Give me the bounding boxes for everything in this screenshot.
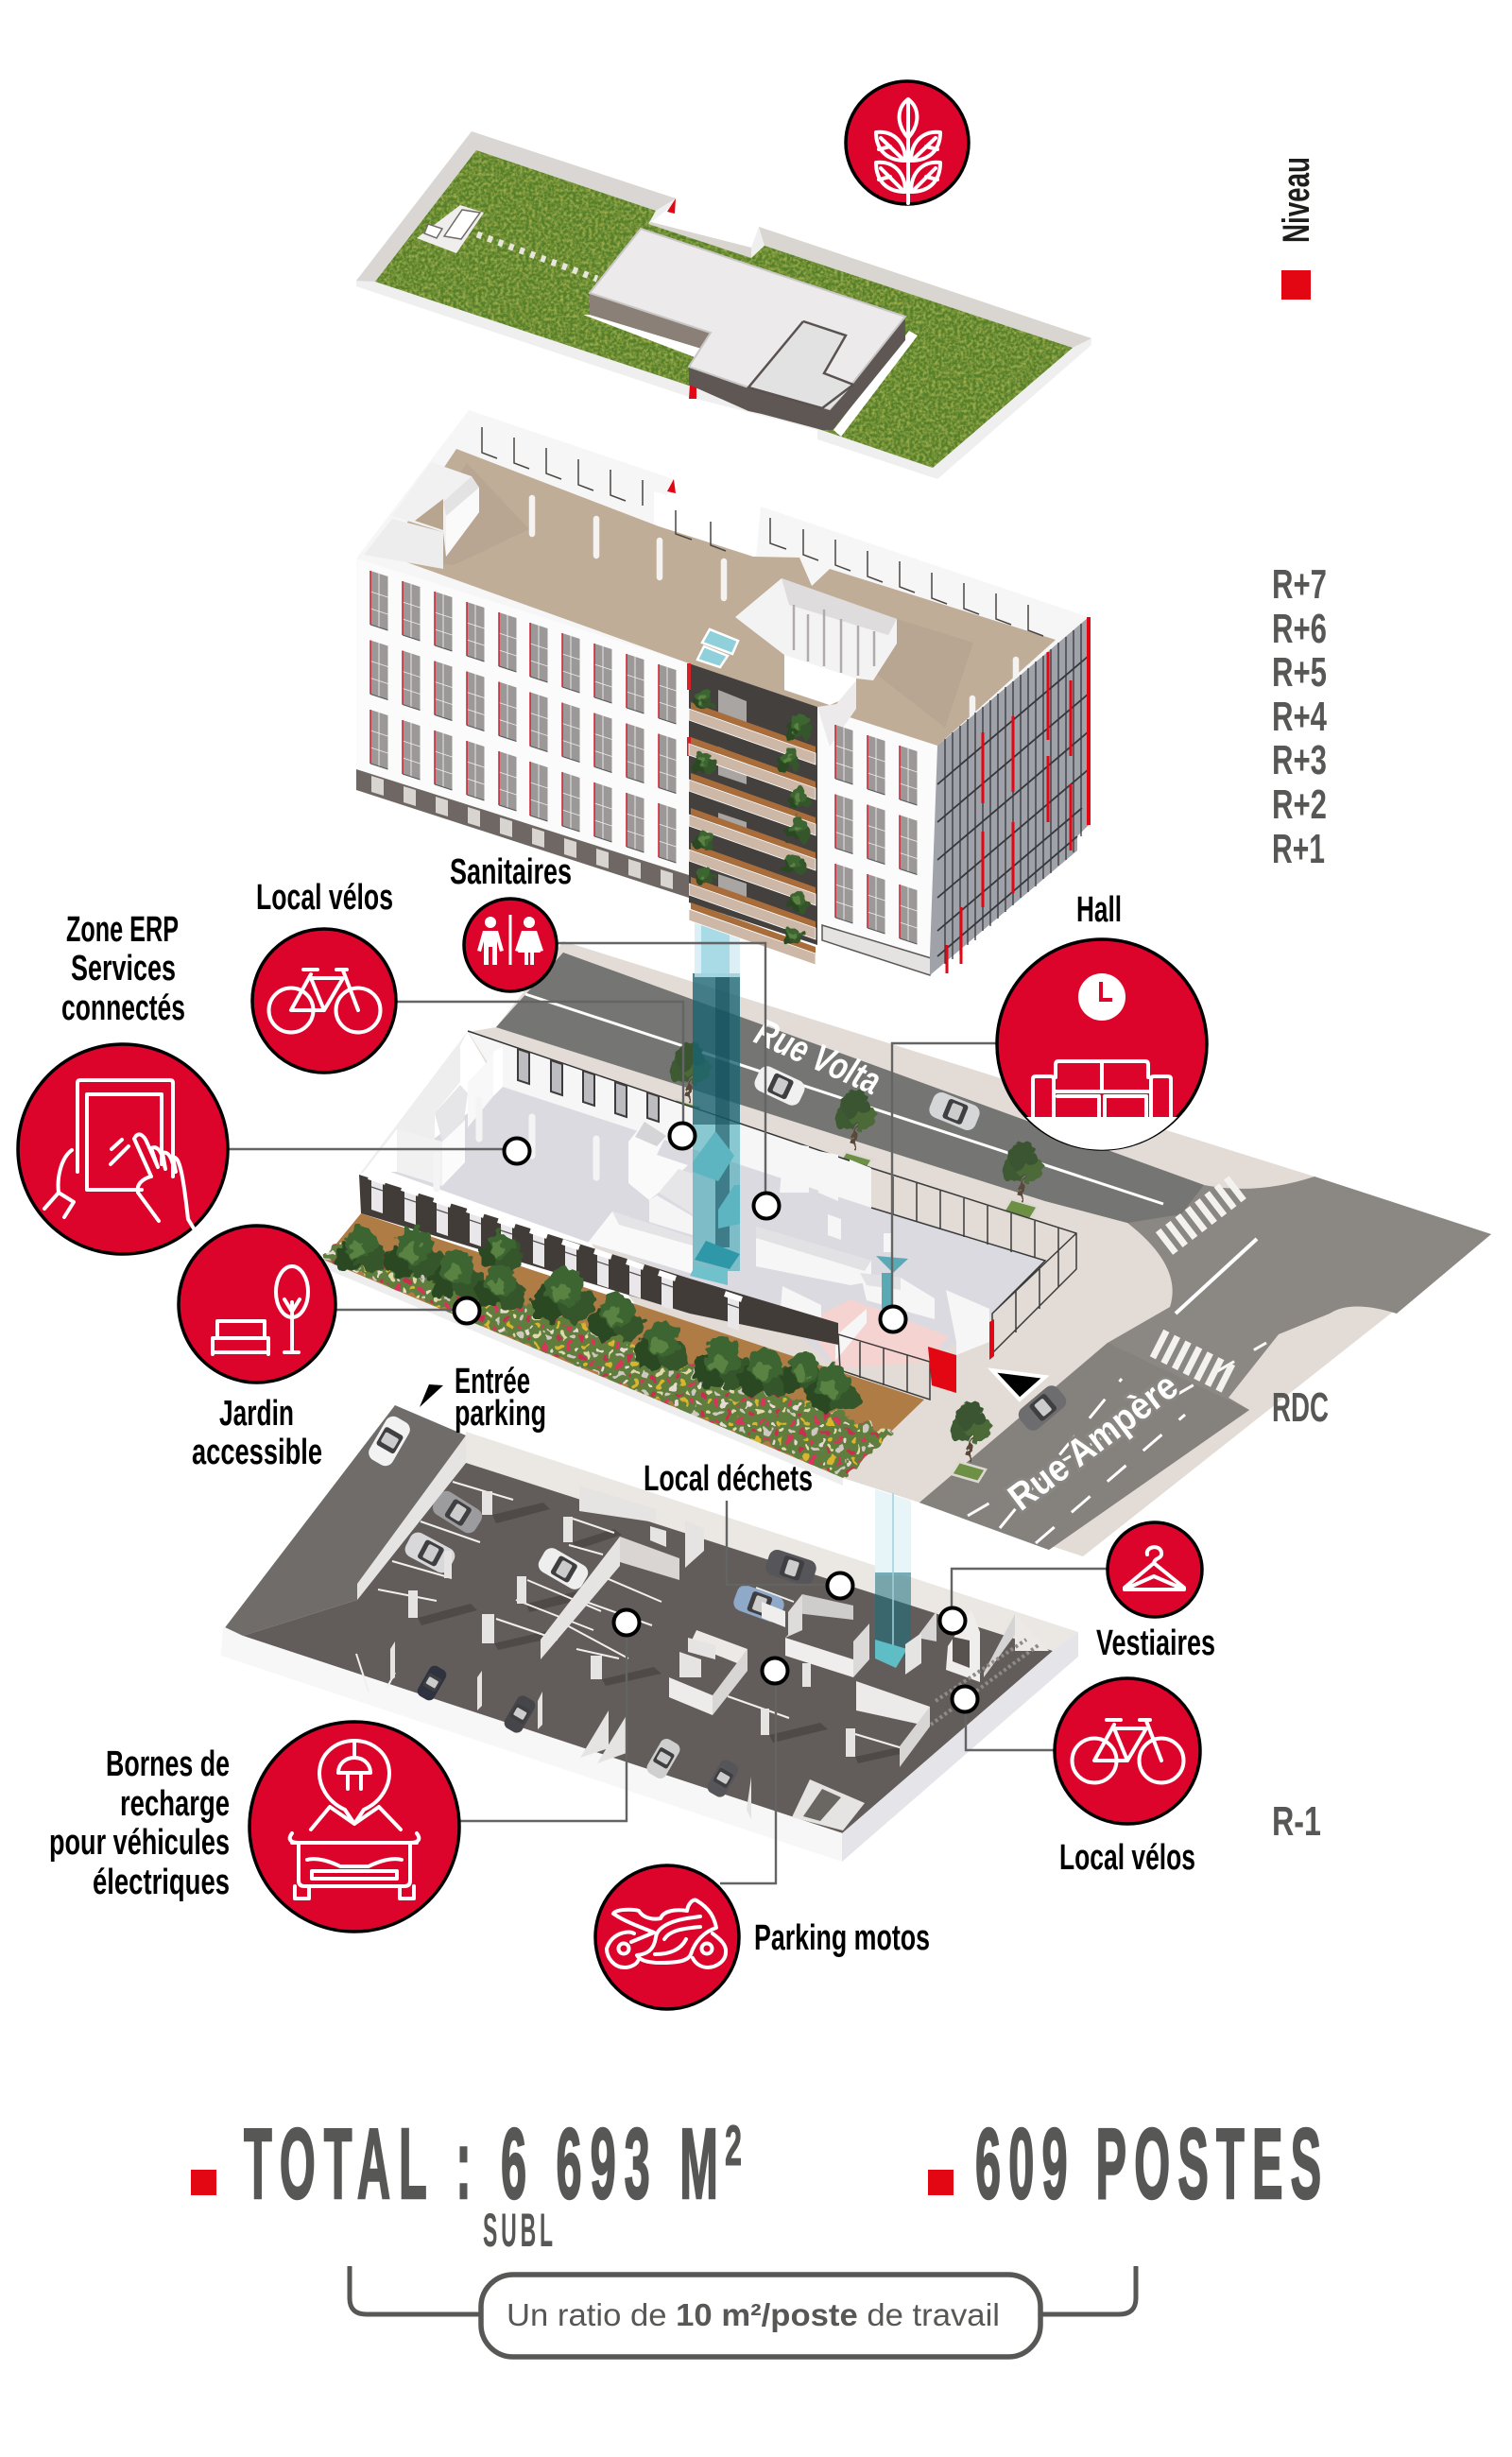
label: Zone ERP Services connectés (61, 910, 185, 1028)
stepping stones (477, 234, 597, 279)
connector lines (228, 943, 1108, 1883)
street lane markings (525, 994, 1266, 1543)
icon: bicycle upper (252, 929, 396, 1073)
panel: roof terrace level (356, 131, 1091, 479)
lift shafts glass (697, 629, 738, 667)
level labels R+7 to R+1: R+1 (1272, 826, 1325, 872)
right wing windows (835, 725, 917, 944)
vertical shaft: lower section (875, 1489, 911, 1668)
level labels R+7 to R+1 (1272, 561, 1327, 872)
label: Jardin accessible: accessible (192, 1433, 322, 1472)
dark south wall (359, 1175, 838, 1345)
back wall with windows (468, 1031, 871, 1208)
balconies with planters (689, 690, 816, 965)
label: Vestiaires: Vestiaires (1096, 1624, 1215, 1663)
parking bay lines (356, 1482, 902, 1748)
level labels R+7 to R+1: R+4 (1272, 694, 1327, 740)
back wall (466, 1432, 1078, 1651)
legend marker (1281, 270, 1311, 300)
icon: tablet touch (18, 1044, 228, 1254)
workstation count stat: 609 POSTES (975, 2108, 1321, 2220)
red corner mark (667, 479, 676, 493)
service core (735, 578, 897, 747)
motorcycle and bike storage texture (931, 1640, 1040, 1725)
right wing front facade (817, 707, 937, 960)
icon: hall sofa and clock (997, 939, 1207, 1150)
red entrance (928, 1319, 994, 1393)
partition walls (357, 1435, 1049, 1830)
label: Bornes de recharge: Bornes de (106, 1744, 230, 1784)
icon: bench and tree (179, 1226, 335, 1383)
right facade (930, 617, 1089, 975)
rooftop volume (590, 229, 905, 430)
street name: Rue Volta: Rue Volta (748, 1011, 886, 1103)
legend heading: Niveau: Niveau (1276, 157, 1317, 243)
total surface stat: TOTAL : 6 693 M (244, 2108, 718, 2220)
label: Local vélos upper: Local vélos (256, 878, 393, 918)
location pins (454, 1123, 977, 1712)
vertical shaft: upper section (693, 973, 740, 1271)
ground floor slab (390, 1087, 1045, 1368)
label: Zone ERP Services connectés: Services (71, 949, 176, 988)
icon: motorcycle (595, 1865, 739, 2009)
planter box (417, 205, 484, 253)
icon: hanger (1108, 1522, 1202, 1617)
label: Zone ERP Services connectés: connectés (61, 988, 185, 1028)
red section marks (667, 198, 696, 399)
label: Parking motos: Parking motos (754, 1918, 930, 1958)
right wing ground glazing (822, 925, 937, 975)
total surface stat: SUBL (483, 2205, 553, 2258)
panel: R-1 parking level (221, 1405, 1078, 1862)
label: Bornes de recharge: pour véhicules (49, 1823, 230, 1863)
panel: R+1 to R+7 office building (356, 410, 1089, 975)
label: Sanitaires: Sanitaires (450, 852, 572, 892)
icon: leaf branch (846, 81, 969, 204)
sidewalk base (468, 941, 1491, 1556)
street name: Rue Ampère: Rue Ampère (1001, 1365, 1186, 1519)
road surfaces (496, 953, 1491, 1550)
back and side glazing (838, 1168, 1076, 1400)
label: Jardin accessible (192, 1394, 322, 1472)
icon: toilets (464, 899, 557, 991)
crosswalks (1157, 1187, 1238, 1380)
ratio bracket and callout (350, 2266, 1136, 2357)
accessible garden (319, 1213, 924, 1486)
central balcony recess (689, 663, 817, 945)
level labels R+7 to R+1: R+7 (1272, 561, 1327, 608)
left facade (356, 558, 689, 875)
level labels R+7 to R+1: R+6 (1272, 606, 1327, 652)
icon: electric car charging (249, 1722, 459, 1932)
level label R-1: R-1 (1272, 1798, 1321, 1845)
label: Hall: Hall (1076, 890, 1122, 930)
vertical shaft above plate (695, 915, 740, 977)
total surface stat: 2 (725, 2114, 742, 2177)
icon: bicycle lower (1055, 1678, 1200, 1824)
parking floor (243, 1463, 1053, 1833)
ratio bracket and callout: Un ratio de 10 m²/poste de travail (507, 2297, 1000, 2332)
level labels R+7 to R+1: R+3 (1272, 737, 1327, 783)
back wall windows (482, 427, 1043, 636)
green roof lawn (375, 150, 1073, 468)
parking cars (366, 1413, 818, 1799)
left facade windows (370, 571, 677, 863)
label: Entrée parking with arrow (420, 1362, 546, 1434)
label: Local déchets: Local déchets (644, 1459, 813, 1499)
label: Zone ERP Services connectés: Zone ERP (66, 910, 179, 950)
floor columns (532, 498, 1016, 716)
panel: RDC ground floor plate (319, 941, 1491, 1556)
label: Jardin accessible: Jardin (219, 1394, 294, 1434)
parked and moving cars (752, 1063, 1070, 1434)
label: Entrée parking with arrow: parking (455, 1394, 546, 1434)
level labels R+7 to R+1: R+2 (1272, 782, 1327, 828)
base of left facade (356, 769, 689, 898)
black entrance arrow (992, 1370, 1045, 1400)
total surface stat (191, 2108, 742, 2258)
outer walls (221, 1626, 1078, 1862)
level label RDC: RDC (1272, 1384, 1329, 1431)
interior partition walls (359, 1031, 989, 1361)
label: Bornes de recharge (49, 1744, 230, 1902)
label: Bornes de recharge: électriques (93, 1863, 230, 1902)
label: Local vélos lower: Local vélos (1059, 1838, 1195, 1878)
storage room (364, 462, 479, 569)
building walls and top floor (356, 410, 1089, 746)
street trees (668, 1042, 1042, 1482)
label: Bornes de recharge: recharge (120, 1784, 230, 1824)
level labels R+7 to R+1: R+5 (1272, 649, 1327, 696)
pillar shadows (418, 1503, 909, 1763)
white path around volume (583, 315, 918, 437)
ramp (223, 1405, 466, 1636)
label: Entrée parking with arrow: Entrée (455, 1362, 530, 1401)
